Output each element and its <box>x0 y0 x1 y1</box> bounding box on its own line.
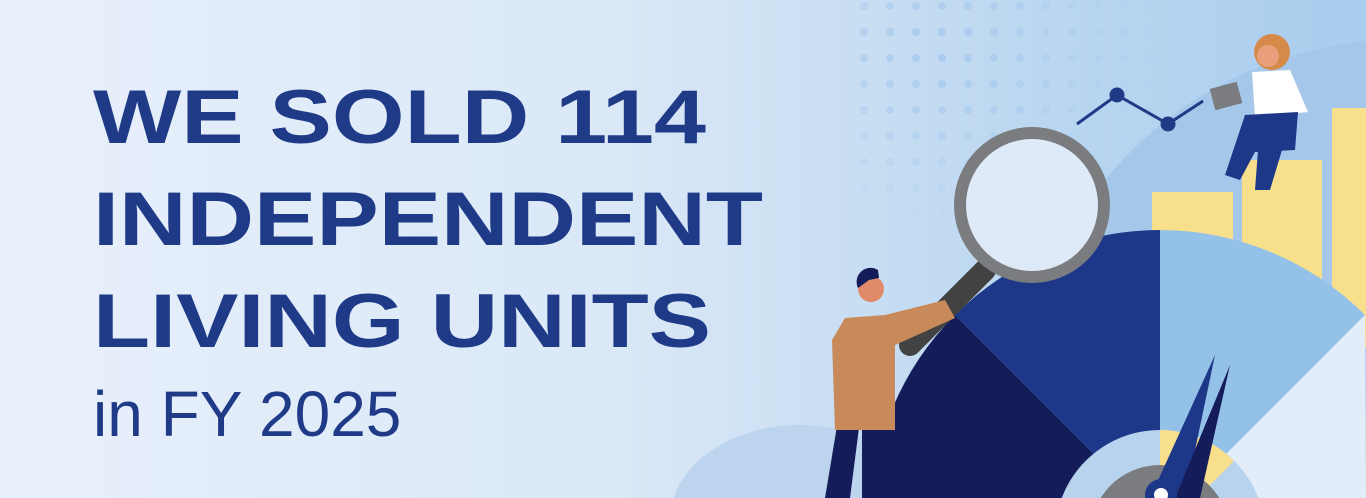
title line 2: INDEPENDENT <box>93 177 763 262</box>
woman <box>1210 34 1308 190</box>
title line 1: WE SOLD 114 <box>93 75 706 160</box>
line chart <box>1077 89 1203 130</box>
title line 3: LIVING UNITS <box>93 279 711 364</box>
yellow bar chart <box>1152 108 1366 348</box>
gauge <box>870 230 1366 498</box>
man <box>825 268 955 498</box>
subtitle: in FY 2025 <box>93 378 401 450</box>
magnifier <box>910 133 1104 345</box>
